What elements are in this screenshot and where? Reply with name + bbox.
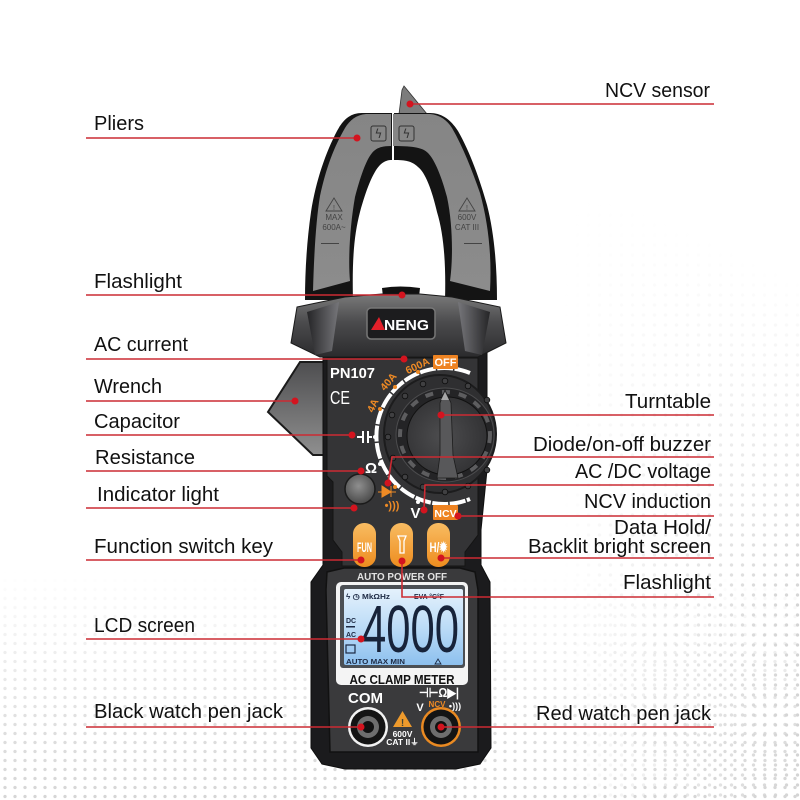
FUN key: FUN bbox=[357, 539, 372, 555]
callout: Resistance: Resistance bbox=[95, 447, 195, 469]
callout: Pliers bbox=[86, 113, 360, 142]
callout: Function switch key: Function switch key bbox=[94, 536, 273, 558]
callout: Data Hold / Backlit bright screen: Backlit bright screen bbox=[528, 536, 711, 558]
callout: NCV sensor: NCV sensor bbox=[605, 80, 710, 102]
CE mark: CE bbox=[330, 388, 350, 408]
LCD digits: 4000 bbox=[362, 593, 459, 667]
function keys bbox=[353, 523, 450, 567]
callout: AC current bbox=[86, 334, 408, 362]
NCV tag: NCV bbox=[434, 508, 457, 520]
black jack bbox=[348, 707, 388, 747]
LCD top indicators: ϟ ◷ MkΩHz bbox=[346, 592, 390, 601]
callout: Black watch pen jack: Black watch pen jack bbox=[94, 701, 284, 723]
callout: LCD screen: LCD screen bbox=[94, 615, 195, 637]
range markings bbox=[365, 355, 432, 504]
AC CLAMP METER: AC CLAMP METER bbox=[350, 673, 454, 687]
range markings: 600A bbox=[404, 355, 432, 377]
callout: NCV induction bbox=[454, 491, 714, 520]
callout: NCV induction: NCV induction bbox=[584, 491, 711, 513]
callout: Diode/on-off buzzer bbox=[384, 434, 714, 486]
callout: Flashlight key bbox=[398, 558, 714, 597]
background: halftone dots right bbox=[609, 335, 800, 797]
callout: Function switch key bbox=[86, 536, 364, 564]
left plier jaw: 600A~ bbox=[322, 223, 346, 232]
LCD triangle bbox=[435, 659, 441, 664]
clamp meter bbox=[268, 86, 506, 769]
jack function symbols: ⊣⊢Ω▶| bbox=[419, 685, 459, 700]
LCD unit indicators: EVA °C°F bbox=[414, 592, 444, 601]
meter body bbox=[311, 350, 491, 769]
callout: Flashlight top bbox=[86, 271, 406, 298]
callout: Data Hold / Backlit bright screen bbox=[438, 517, 714, 562]
callout: Flashlight top: Flashlight bbox=[94, 271, 182, 293]
left plier jaw bbox=[305, 113, 392, 300]
NCV sensor tip bbox=[399, 86, 427, 114]
callout: Black watch pen jack bbox=[86, 701, 364, 730]
callout: Indicator light: Indicator light bbox=[97, 484, 219, 506]
range markings: 40A bbox=[378, 371, 400, 393]
OFF tag: OFF bbox=[434, 357, 457, 369]
callout: NCV sensor bbox=[406, 80, 714, 108]
V symbol: V bbox=[410, 505, 421, 522]
callout: AC/DC voltage bbox=[420, 461, 714, 514]
rotary knob bbox=[383, 374, 497, 495]
left plier jaw: ! bbox=[333, 205, 335, 212]
hold backlight key: H/✹ bbox=[430, 539, 448, 555]
background: halftone dots bottom bbox=[3, 615, 797, 798]
callout: Pliers: Pliers bbox=[94, 113, 144, 135]
callout: LCD screen bbox=[86, 615, 364, 642]
LCD screen bbox=[336, 582, 468, 687]
LCD mode indicators: AC bbox=[346, 632, 356, 639]
warning triangle: ! bbox=[401, 718, 404, 729]
callout: Data Hold / Backlit bright screen: Data Hold/ bbox=[614, 517, 711, 539]
front panel upper bbox=[327, 358, 478, 566]
diode symbol bbox=[378, 486, 396, 497]
right plier jaw: ϟ bbox=[403, 127, 410, 141]
COM label: COM bbox=[348, 690, 383, 707]
600V CAT II text: 600V bbox=[393, 729, 413, 739]
left plier jaw: MAX bbox=[325, 213, 343, 222]
LCD mode indicators bbox=[346, 618, 356, 653]
head shoulders bbox=[291, 294, 506, 357]
600V CAT II text: CAT II⏚ bbox=[386, 737, 419, 747]
indicator light bbox=[345, 474, 375, 504]
right plier jaw bbox=[393, 113, 497, 300]
flashlight key bbox=[390, 523, 413, 567]
jack function symbols: NCV bbox=[429, 700, 446, 709]
right plier jaw: 600V bbox=[458, 213, 477, 222]
warning triangle bbox=[393, 711, 412, 729]
callout: Turntable: Turntable bbox=[625, 391, 711, 413]
LCD mode indicators: DC bbox=[346, 618, 356, 625]
model PN107: PN107 bbox=[330, 365, 375, 382]
capacitor symbol bbox=[357, 431, 372, 443]
callout: Resistance bbox=[86, 447, 364, 474]
auto power off text: AUTO POWER OFF bbox=[357, 571, 448, 583]
callout: Wrench: Wrench bbox=[94, 376, 162, 398]
callout: AC/DC voltage: AC /DC voltage bbox=[575, 461, 711, 483]
red jack bbox=[421, 707, 461, 747]
buzzer symbol: •))) bbox=[385, 500, 400, 512]
range markings: 4A bbox=[365, 397, 382, 414]
LCD bottom indicators: AUTO MAX MIN bbox=[346, 657, 405, 666]
callout: AC current: AC current bbox=[94, 334, 188, 356]
brand badge bbox=[367, 308, 435, 339]
brand badge: NENG bbox=[384, 317, 429, 334]
600V CAT II text bbox=[386, 729, 419, 747]
jack function symbols: V bbox=[416, 702, 424, 714]
right plier jaw: CAT III bbox=[455, 223, 479, 232]
callout: Capacitor bbox=[86, 411, 356, 438]
callout: Diode/on-off buzzer: Diode/on-off buzzer bbox=[533, 434, 711, 456]
left plier jaw: ϟ bbox=[375, 127, 382, 141]
callout: Red watch pen jack bbox=[438, 703, 714, 730]
callout: Indicator light bbox=[86, 484, 358, 512]
callout: Flashlight key: Flashlight bbox=[623, 572, 711, 594]
callout: Red watch pen jack: Red watch pen jack bbox=[536, 703, 712, 725]
rotary scale arc bbox=[376, 368, 470, 504]
callout: Turntable bbox=[438, 391, 714, 418]
lower panel bbox=[326, 568, 478, 752]
jack function symbols: •))) bbox=[449, 701, 461, 711]
right plier jaw: ! bbox=[466, 205, 468, 212]
callout: Capacitor: Capacitor bbox=[94, 411, 180, 433]
flashlight nub bbox=[382, 286, 420, 304]
callout: Wrench bbox=[86, 376, 298, 404]
wrench lever bbox=[268, 362, 325, 455]
jack function symbols bbox=[416, 685, 461, 714]
ohm symbol: Ω bbox=[365, 460, 377, 477]
